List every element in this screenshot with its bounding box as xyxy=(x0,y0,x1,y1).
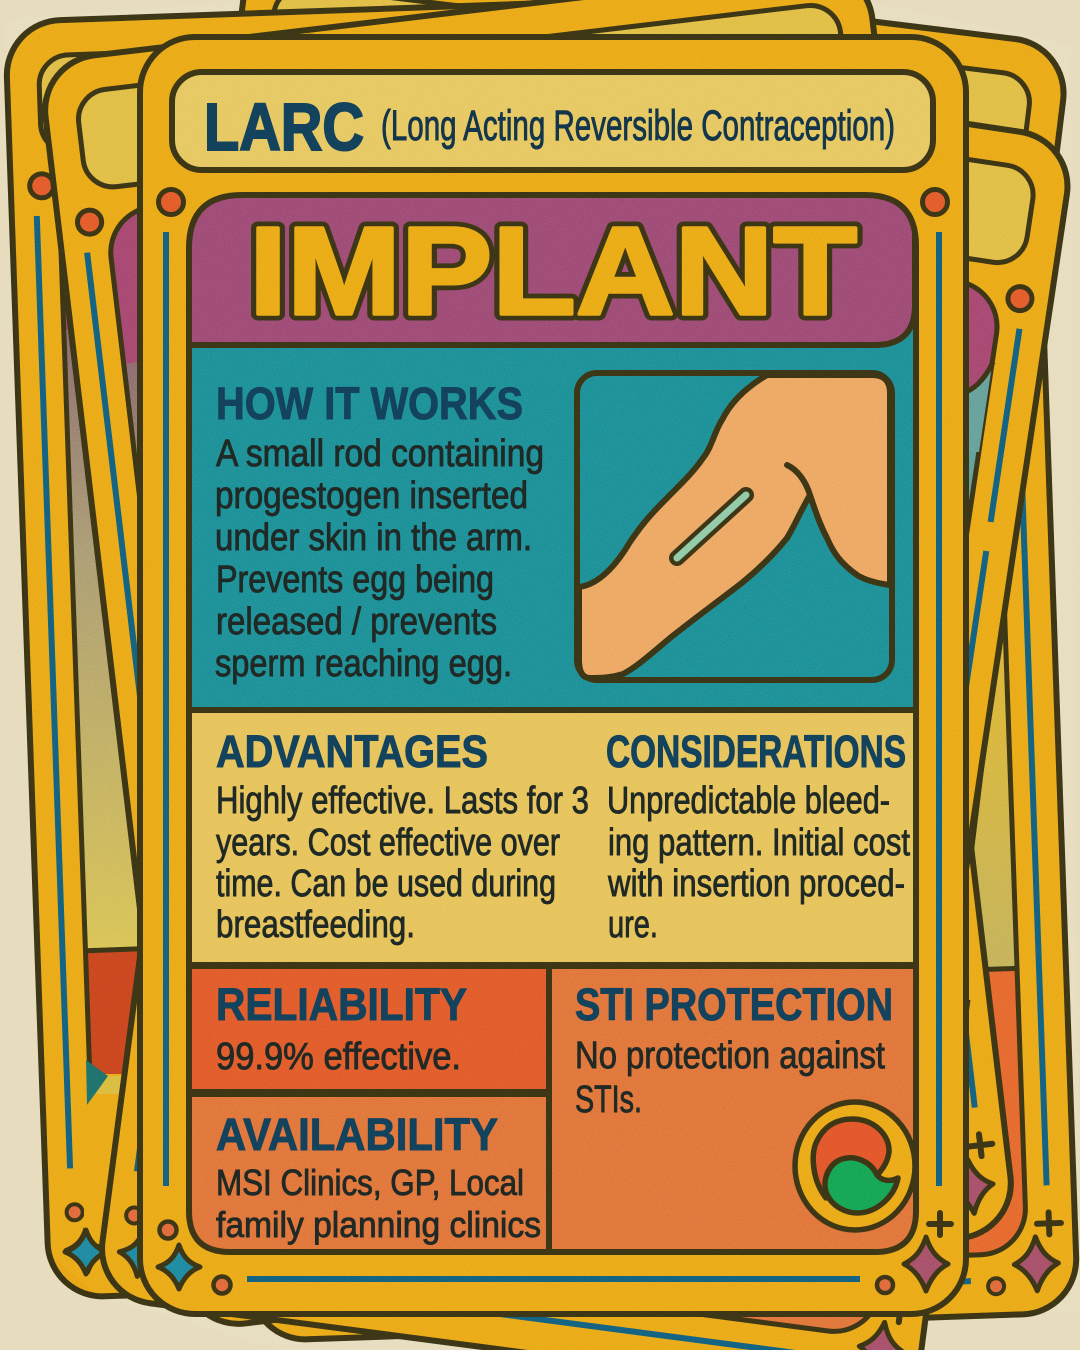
back card: tilted, left and bottom portion xyxy=(99,34,970,1350)
panel outline xyxy=(189,195,916,1252)
title banner xyxy=(172,72,933,170)
text block: advantages: ADVANTAGES xyxy=(216,726,488,777)
implant rod xyxy=(677,495,746,558)
back card: left patch below red panel xyxy=(65,1060,144,1274)
text block: considerations: Unpredictable bleed- xyxy=(607,780,890,822)
main card xyxy=(140,37,966,1314)
text block: how it works: Prevents egg being xyxy=(216,559,494,601)
decor: bottom right dot xyxy=(877,1277,893,1293)
text block: how it works: released / prevents xyxy=(216,601,497,643)
decor: teal star xyxy=(158,1245,200,1289)
arm xyxy=(579,375,890,678)
text block: advantages: breastfeeding. xyxy=(216,904,415,946)
card frame xyxy=(140,37,966,1314)
content panels xyxy=(186,190,923,1259)
decor: lower left dot xyxy=(160,1222,176,1238)
text block: how it works: HOW IT WORKS xyxy=(216,378,523,429)
heading: IMPLANT: IMPLANT xyxy=(249,202,857,341)
back card: bottom right xyxy=(208,36,1078,1341)
back card: tilted, right portion xyxy=(969,121,1070,870)
text block: advantages: years. Cost effective over xyxy=(216,822,560,864)
panel: how it works background xyxy=(190,300,916,710)
panel: sti protection xyxy=(549,966,923,1258)
text block: how it works: sperm reaching egg. xyxy=(215,643,512,685)
decor: side and bottom lines xyxy=(166,232,939,1279)
title: LARC: LARC xyxy=(204,90,364,165)
icon: swirl emblem xyxy=(795,1102,915,1230)
text block: availability: AVAILABILITY xyxy=(216,1109,498,1160)
decor: mauve star xyxy=(904,1237,948,1291)
text block: how it works xyxy=(215,378,544,685)
panel: implant heading background xyxy=(186,190,915,345)
text block: sti protection: STIs. xyxy=(575,1079,642,1121)
text block: reliability: RELIABILITY xyxy=(216,979,467,1030)
back card: far left xyxy=(5,0,875,1298)
panel: advantages and considerations xyxy=(186,710,920,965)
panel: reliability xyxy=(186,966,549,1092)
text block: reliability xyxy=(216,979,467,1078)
decor: top right dot xyxy=(922,190,948,214)
text block: how it works: under skin in the arm. xyxy=(215,517,532,559)
decor: top left dot xyxy=(158,190,184,214)
text block: considerations: CONSIDERATIONS xyxy=(606,726,906,777)
text block: considerations xyxy=(606,726,910,946)
icon: arm with implant xyxy=(577,373,892,680)
text block: sti protection xyxy=(575,979,893,1121)
panel: availability xyxy=(186,1094,549,1259)
text block: how it works: progestogen inserted xyxy=(215,475,528,517)
decor: plus sign xyxy=(929,1213,951,1235)
text block: availability: family planning clinics xyxy=(216,1204,541,1245)
text block: considerations: ing pattern. Initial cost xyxy=(608,822,910,864)
text block: advantages: time. Can be used during xyxy=(216,863,556,905)
text block: availability: MSI Clinics, GP, Local xyxy=(216,1162,524,1203)
text block: how it works: A small rod containing xyxy=(216,433,544,475)
text block: considerations: with insertion proced- xyxy=(607,863,905,905)
decor: bottom left dot xyxy=(214,1276,230,1294)
text block: sti protection: STI PROTECTION xyxy=(575,979,893,1030)
text block: sti protection: No protection against xyxy=(575,1035,885,1077)
heading: IMPLANT: IMPLANT xyxy=(249,202,857,341)
text block: advantages: Highly effective. Lasts for 3 xyxy=(216,780,589,822)
text block: considerations: ure. xyxy=(608,904,658,946)
text block: availability xyxy=(216,1109,541,1245)
text block: reliability: 99.9% effective. xyxy=(216,1036,461,1078)
text block: advantages xyxy=(216,726,589,946)
